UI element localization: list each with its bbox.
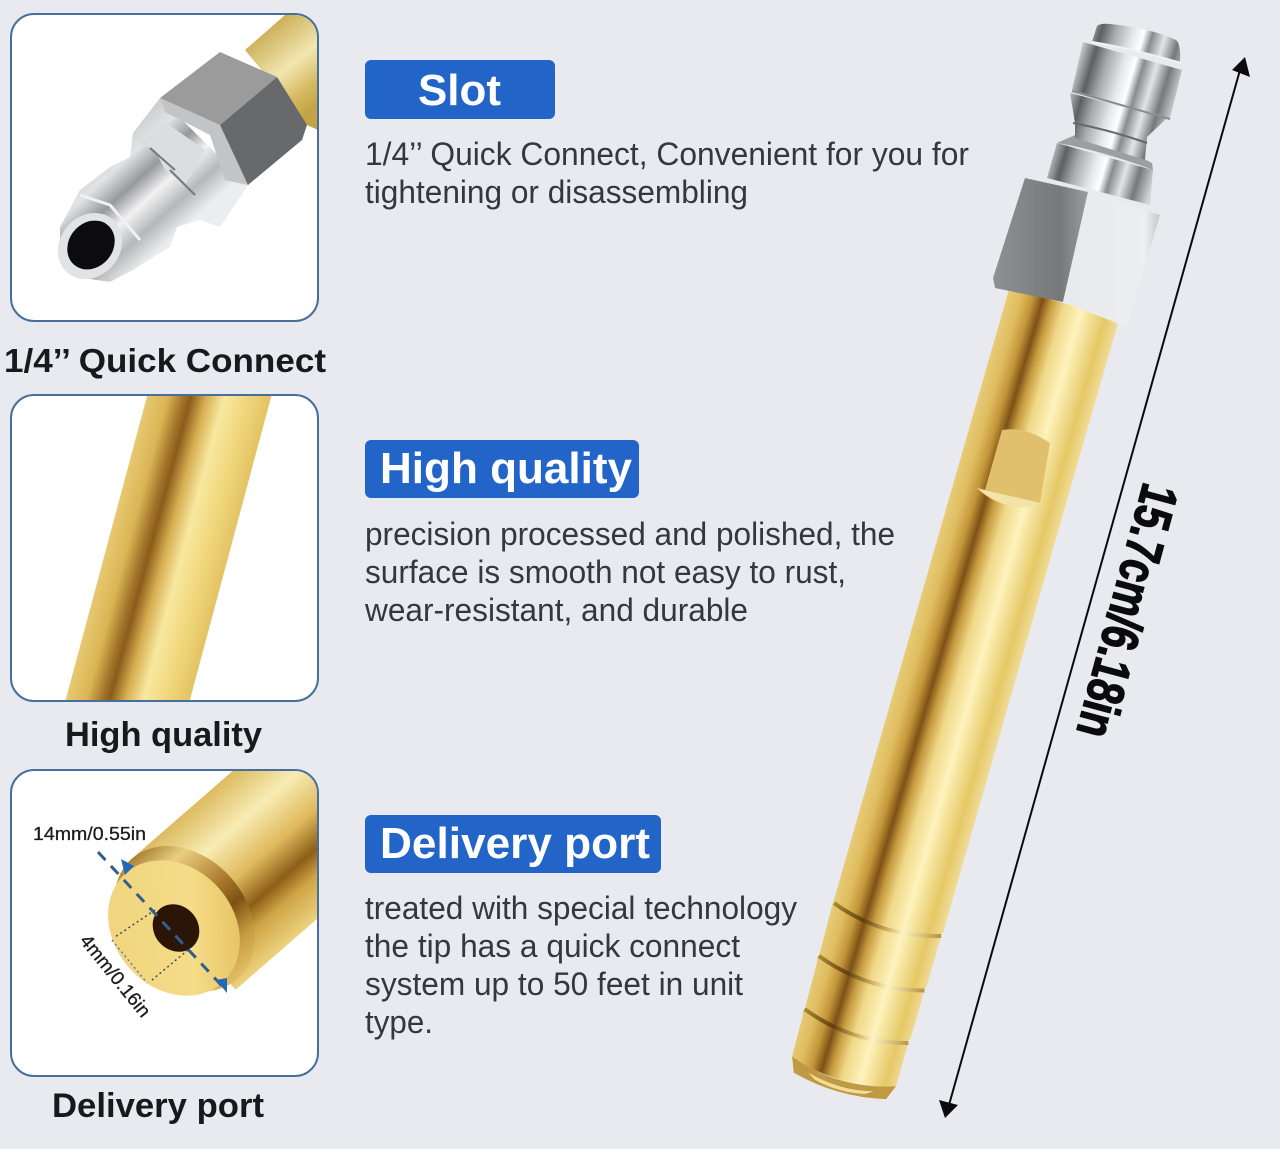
- text: delivery port description: the tip has a quick connect: [365, 928, 740, 964]
- label: inner diameter: 4mm/0.16in: [75, 931, 154, 1022]
- text: delivery port description: treated with special technology: [365, 890, 797, 926]
- illustration: brass extension with quick connect: [783, 24, 1182, 1107]
- text: slot description: 1/4’’ Quick Connect, Convenient for you for: [365, 136, 969, 172]
- grooves: [831, 903, 942, 944]
- arrow: overall length dimension: [939, 57, 1250, 1118]
- caption: quick connect: 1/4’’ Quick Connect: [4, 342, 326, 379]
- icon: brass tube behind nut: [245, 15, 318, 130]
- icon: hex nut top face: [160, 52, 277, 125]
- text: delivery port description: type.: [365, 1004, 433, 1040]
- icon: hex nut light face: [1063, 192, 1160, 327]
- label: outer diameter: 14mm/0.55in: [33, 824, 146, 844]
- icon: plug bore opening: [58, 213, 122, 279]
- icon: polished brass tube: [66, 396, 272, 700]
- icon: hex nut side face: [220, 77, 307, 185]
- icon: brass cylinder end view: [108, 771, 317, 996]
- icon: flange and barb details: [80, 98, 248, 240]
- dimension: outer diameter dashed arrow: [98, 852, 227, 993]
- text: high quality description: [364, 516, 895, 628]
- caption: high quality: High quality: [65, 716, 262, 754]
- text: high quality description: precision processed and polished, the: [365, 516, 895, 552]
- panel: delivery port photo card: [10, 769, 319, 1077]
- label: overall length: 15.7cm/6.18in: [1065, 478, 1188, 744]
- badge: High quality: High quality: [380, 444, 633, 493]
- icon: bore hole: [152, 904, 200, 952]
- text: high quality description: wear-resistant, and durable: [364, 592, 748, 628]
- text: slot description: [365, 136, 969, 210]
- caption: delivery port: Delivery port: [52, 1087, 264, 1125]
- panel: high quality photo card: [10, 394, 319, 702]
- icon: brass tube: [783, 288, 1119, 1107]
- badge: Delivery port: Delivery port: [380, 819, 650, 868]
- text: slot description: tightening or disassembling: [365, 174, 748, 210]
- badge: Slot: [365, 60, 555, 119]
- icon: milled flat slot: [977, 429, 1050, 507]
- text: delivery port description: system up to 50 feet in unit: [365, 966, 743, 1002]
- panel: quick connect photo card: [11, 14, 318, 321]
- icon: steel plug silhouette: [60, 98, 248, 282]
- icon: steel connector barrel: [1047, 24, 1182, 205]
- text: delivery port description: [365, 890, 797, 1040]
- text: high quality description: surface is smooth not easy to rust,: [365, 554, 846, 590]
- icon: hex nut dark face: [993, 178, 1088, 302]
- dimension: inner diameter dotted guides: [112, 910, 188, 983]
- badge: Slot: Slot: [418, 66, 501, 115]
